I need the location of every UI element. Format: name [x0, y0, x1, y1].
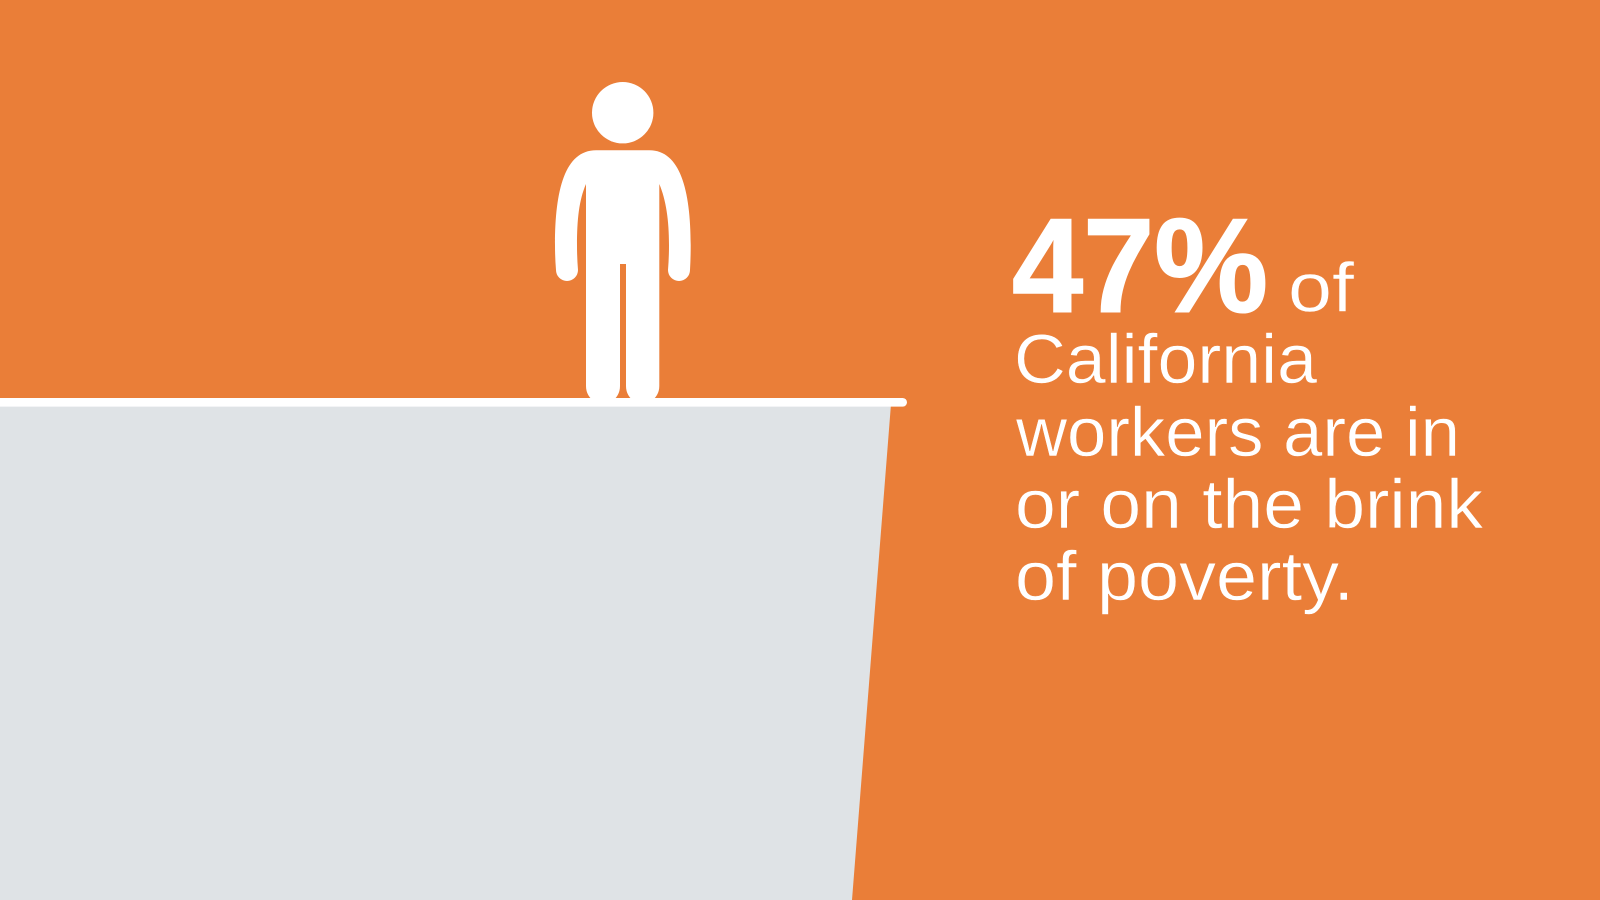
grey cliff	[0, 404, 891, 900]
text: California: California	[1014, 320, 1317, 398]
cliff edge ledge	[0, 398, 907, 407]
text: workers are in: workers are in	[1015, 393, 1460, 471]
text: or on the brink: or on the brink	[1015, 465, 1484, 543]
icon: person standing on the edge	[555, 82, 691, 402]
big number: 47%: 47%	[1012, 192, 1268, 341]
text: of poverty.: of poverty.	[1015, 537, 1354, 615]
statistic text block	[1012, 192, 1484, 615]
text: of: of	[1288, 249, 1355, 327]
